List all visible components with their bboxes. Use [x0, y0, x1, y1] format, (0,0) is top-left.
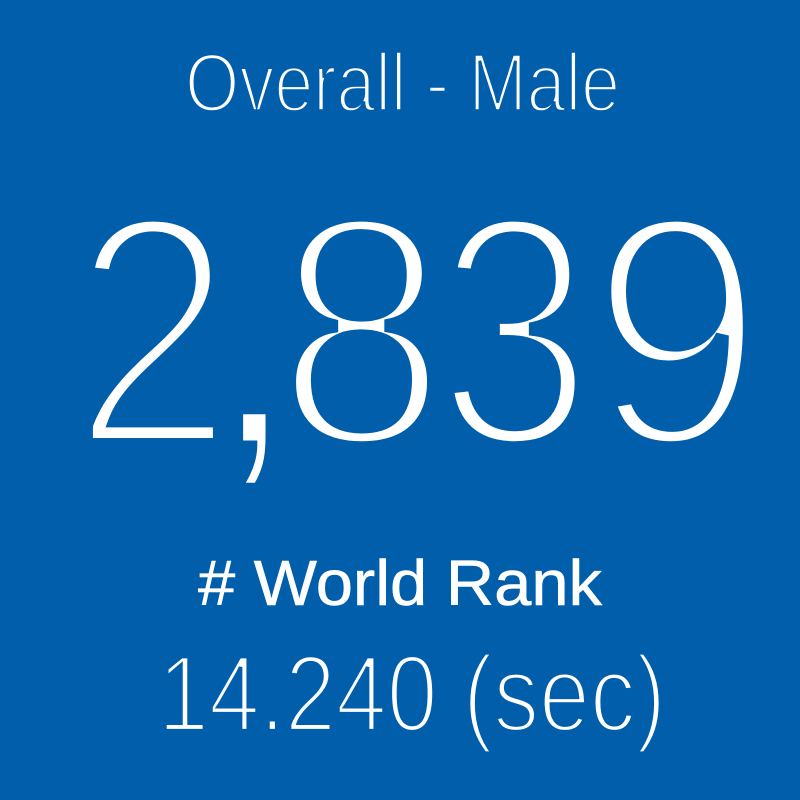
metric value: 14.240 (sec) [158, 633, 666, 755]
main number: 3 [437, 147, 593, 515]
main number: 2 [72, 147, 234, 515]
title: Overall - Male [185, 36, 620, 129]
main number: 8 [276, 147, 447, 515]
main number: 9 [590, 148, 764, 516]
metric label: # World Rank [198, 547, 603, 619]
main number [72, 146, 764, 516]
main number: , [208, 146, 300, 515]
